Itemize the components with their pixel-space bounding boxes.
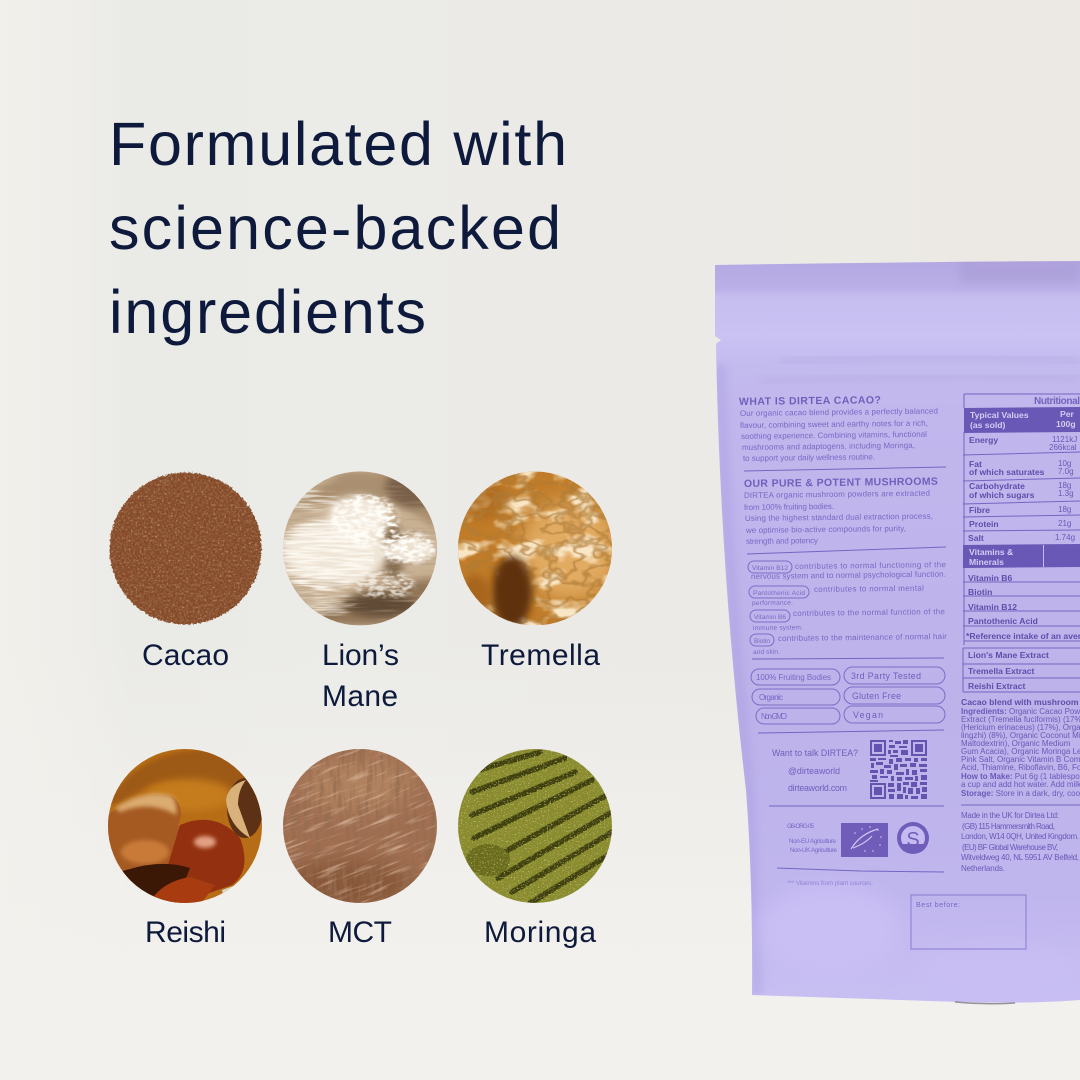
ingredient: reishi: [108, 749, 263, 949]
label: Moringa: Moringa: [484, 916, 596, 949]
text block: our pure and potent mushrooms: [744, 476, 946, 554]
table rows: Fibre: [969, 505, 990, 515]
table rows: [963, 435, 1080, 691]
text block: what is dirtea cacao: soothing experience. Combining vitamins, functional: [741, 430, 927, 441]
table rows: 10g: [1058, 459, 1071, 468]
text block: vitamin claims: Vitamin B12: [752, 565, 788, 572]
label: MCT: MCT: [328, 916, 392, 949]
badges: product claims: Organic: [759, 693, 783, 702]
text block: what is dirtea cacao: Our organic cacao blend provides a perfectly balanced: [740, 407, 938, 418]
icon: QR code: [870, 740, 927, 799]
ingredient: MCT: [283, 749, 437, 942]
ingredient: lion's mane: [283, 472, 437, 706]
pouch printed copy: [739, 394, 1080, 949]
table header: 100g: [1056, 419, 1076, 429]
text block: what is dirtea cacao: [739, 394, 946, 471]
text block: vitamin claims: immune system.: [753, 624, 803, 632]
manufacturer address: Made in the UK for Dirtea Ltd:: [961, 811, 1059, 820]
text block: our pure and potent mushrooms: from 100% fruiting bodies.: [744, 502, 834, 512]
certification text: Non-UK Agriculture: [790, 847, 838, 854]
table rows: Vitamin B12: [968, 602, 1017, 612]
table rows: of which sugars: [969, 490, 1035, 500]
pouch bottom shadow: [955, 1002, 1015, 1004]
table rows: Lion's Mane Extract: [968, 650, 1049, 660]
text block: our pure and potent mushrooms: OUR PURE & POTENT MUSHROOMS: [744, 476, 938, 490]
text block: vitamin claims: nervous system and to normal psychological function.: [751, 570, 946, 581]
contact block: Want to talk DIRTEA?: [772, 748, 858, 758]
label: Cacao: Cacao: [142, 639, 229, 672]
text block: vitamin claims: Vitamin B6: [754, 614, 786, 621]
label: Lion's Mane: Mane: [322, 680, 398, 713]
ingredient: tremella: [458, 472, 612, 666]
text block: vitamin claims: Biotin: [754, 638, 770, 645]
table header: [964, 407, 1080, 433]
badges: product claims: [751, 667, 945, 733]
table rows: 266kcal: [1049, 443, 1077, 452]
text block: what is dirtea cacao: mushrooms and adaptogens, including Moringa,: [742, 441, 915, 452]
image: lion's mane mushroom: [283, 472, 437, 626]
table rows: Salt: [968, 533, 984, 543]
text block: our pure and potent mushrooms: DIRTEA organic mushroom powders are extracted: [744, 489, 930, 500]
text block: vitamin claims: and skin.: [753, 649, 780, 656]
label: Lion's Mane: Lion’s: [322, 639, 399, 672]
image: reishi mushroom: [108, 749, 263, 905]
manufacturer address: (EU) BF Global Warehouse BV,: [962, 843, 1058, 852]
label: Lion's Mane: [322, 639, 399, 713]
text block: what is dirtea cacao: WHAT IS DIRTEA CACAO?: [739, 394, 881, 408]
badges: product claims: 3rd Party Tested: [851, 671, 921, 681]
text block: what is dirtea cacao: to support your daily wellness routine.: [743, 452, 875, 463]
text block: our pure and potent mushrooms: Using the highest standard dual extraction process,: [745, 512, 933, 523]
table rows: Fat: [969, 459, 982, 469]
icon: soil association logo: S: [906, 829, 920, 851]
label: Tremella: Tremella: [481, 639, 600, 672]
badges: product claims: 100% Fruiting Bodies: [756, 673, 831, 682]
badges: product claims: Vegan: [853, 710, 883, 720]
product pouch: [700, 255, 1080, 1015]
ingredients text: [961, 697, 1080, 805]
table rows: Energy: [969, 435, 998, 445]
icon: EU organic logo: [841, 823, 888, 857]
table rows: of which saturates: [969, 467, 1045, 477]
nutrition table: Nutritional: [1034, 396, 1080, 407]
table rows: 7.0g: [1058, 467, 1074, 476]
table rows: 18g: [1058, 481, 1071, 490]
table rows: Vitamins &: [969, 547, 1013, 557]
table header: (as sold): [970, 420, 1005, 430]
ingredients text: Maltodextrin), Organic Medium: [961, 739, 1071, 748]
text block: vitamin claims: contributes to the normal function of the: [793, 607, 946, 618]
image: cacao powder: [110, 472, 262, 624]
text block: vitamin claims: [748, 560, 947, 659]
text block: our pure and potent mushrooms: we optimise bio-active compounds for purity,: [745, 524, 906, 535]
ingredient: moringa: [455, 745, 615, 949]
contact block: @dirteaworld: [788, 766, 840, 776]
pouch body: [700, 255, 1080, 1015]
table rows: 21g: [1058, 519, 1071, 528]
table header: Per: [1060, 409, 1075, 419]
manufacturer address: Witveldweg 40, NL 5951 AV Belfeld,: [961, 853, 1079, 862]
contact block: [772, 748, 858, 793]
table rows: 1.74g: [1055, 533, 1075, 542]
ingredients text: a cup and add hot water. Add milk: [961, 780, 1080, 789]
text block: vitamin claims: contributes to normal mental: [814, 584, 924, 594]
text block: vitamin claims: contributes to the maintenance of normal hair: [778, 632, 947, 643]
nutrition table: [963, 394, 1080, 692]
table rows: Carbohydrate: [969, 481, 1025, 491]
certification text: GB-ORG-05: [787, 823, 815, 830]
table rows: 1121kJ: [1052, 435, 1077, 444]
title: Formulated with: [109, 110, 567, 178]
text block: vitamin claims: contributes to normal functioning of the: [795, 560, 947, 571]
contact block: dirteaworld.com: [788, 783, 847, 793]
text block: what is dirtea cacao: flavour, combining sweet and earthy notes for a rich,: [740, 419, 928, 430]
best before box: Best before:: [916, 902, 960, 909]
table rows: Tremella Extract: [968, 666, 1035, 676]
table rows: Vitamin B6: [968, 573, 1012, 583]
image: moringa powder: [455, 745, 615, 907]
footnote: *** Vitamins from plant sources.: [787, 880, 873, 887]
best before box: [911, 895, 1026, 949]
table rows: 18g: [1058, 505, 1071, 514]
title: ingredients: [109, 278, 426, 346]
badges: product claims: Gluten Free: [852, 691, 901, 701]
manufacturer address: London, W14 0QH, United Kingdom.: [961, 832, 1079, 841]
title: science-backed: [109, 194, 561, 262]
certification text: [787, 823, 838, 854]
title: [109, 110, 567, 346]
certification text: Non-EU Agriculture: [789, 838, 837, 845]
text block: vitamin claims: performance.: [752, 599, 793, 607]
manufacturer address: Netherlands.: [961, 864, 1005, 873]
ingredient grid: [108, 468, 620, 965]
table rows: 1.3g: [1058, 489, 1074, 498]
icon: soil association logo: [897, 822, 929, 854]
manufacturer address: [961, 811, 1079, 873]
text block: vitamin claims: Pantothenic Acid: [753, 590, 805, 597]
table rows: Biotin: [968, 587, 992, 597]
table rows: Minerals: [969, 557, 1004, 567]
image: tremella mushroom: [458, 472, 612, 625]
image: coconut: [283, 749, 437, 903]
label: Reishi: Reishi: [145, 916, 226, 949]
table rows: Protein: [969, 519, 999, 529]
table header: Typical Values: [970, 410, 1029, 420]
text block: our pure and potent mushrooms: strength and potency: [746, 536, 818, 546]
table rows: Reishi Extract: [968, 681, 1025, 691]
table rows: Pantothenic Acid: [968, 616, 1038, 626]
ingredient: cacao: [110, 472, 262, 672]
badges: product claims: Non - GMO: [761, 712, 787, 721]
manufacturer address: (GB) 115 Hammersmith Road,: [962, 822, 1055, 831]
